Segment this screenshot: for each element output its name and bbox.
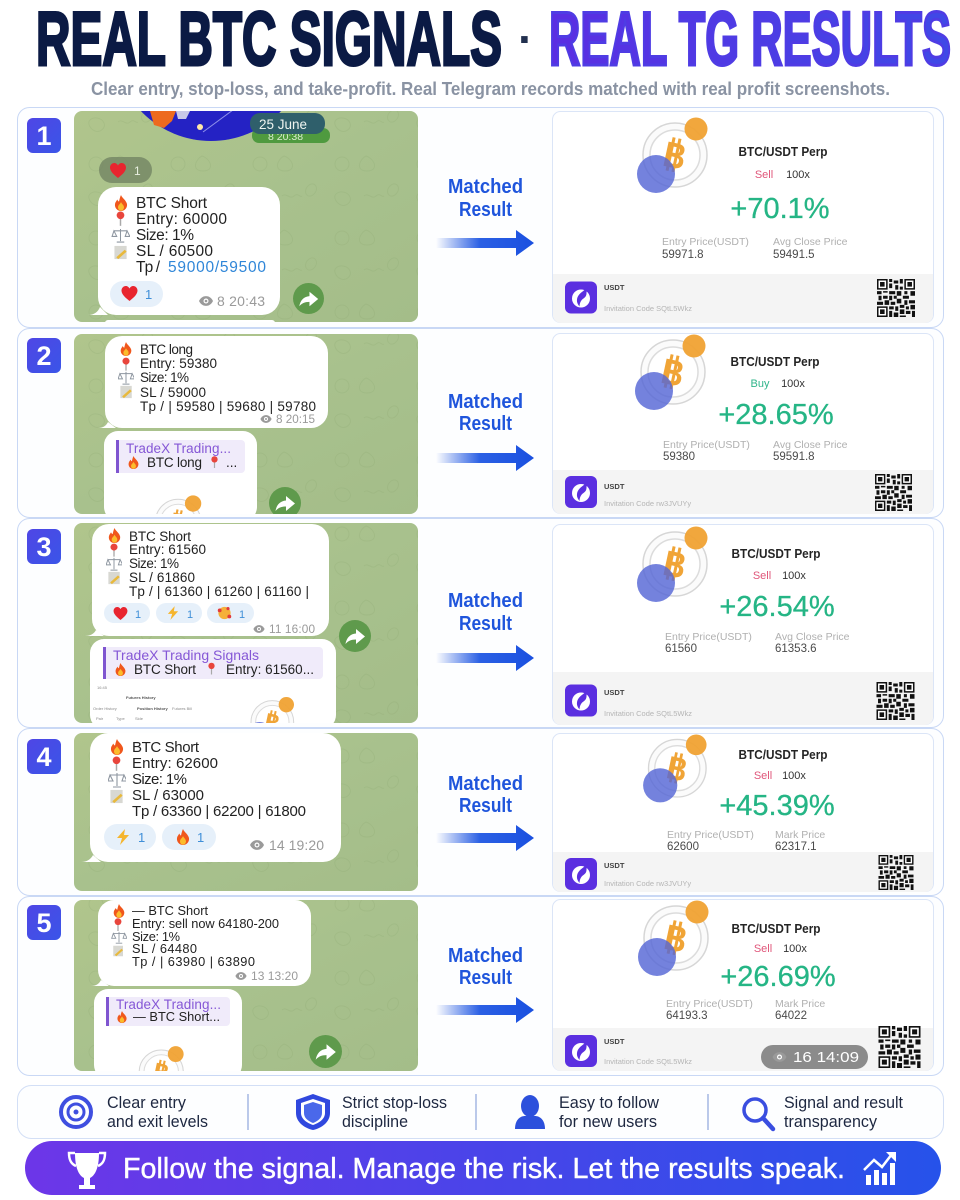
result card 1: Entry Price(USDT)	[662, 236, 749, 248]
signal text 5: SL / 64480	[132, 941, 197, 956]
result card 2: 59380	[663, 451, 695, 463]
result card 4: Sell	[754, 770, 772, 782]
feature: stop-loss	[342, 1094, 447, 1131]
quoted reply 3: TradeX Trading Signals	[113, 647, 259, 663]
result card 5: BTC/USDT Perp	[732, 922, 821, 936]
badge 4	[27, 739, 61, 774]
quoted reply 5: — BTC Short...	[133, 1009, 220, 1024]
signal text 1: Tp /	[136, 259, 161, 276]
result card 2: +28.65%	[718, 399, 834, 431]
icon: target	[61, 1097, 91, 1127]
label: matched result 1	[448, 176, 523, 221]
signal text 1	[112, 195, 266, 276]
quoted reply 3: Entry: 61560...	[226, 662, 314, 677]
result card 3: USDT	[604, 688, 625, 697]
result card 3	[552, 524, 934, 725]
panel: signal 5	[17, 896, 944, 1076]
result card 5: 100x	[783, 943, 807, 955]
badge 1: 1	[36, 121, 52, 151]
result card 5: +26.69%	[720, 961, 836, 993]
result card 3: Sell	[753, 570, 771, 582]
feature: transparency: transparency	[784, 1113, 878, 1131]
icon: trophy	[69, 1153, 105, 1189]
signal text 4: Size: 1%	[132, 771, 187, 788]
reactions 3: 1	[239, 609, 245, 621]
reactions 3	[104, 603, 254, 623]
label: matched result 3: Matched	[448, 590, 523, 612]
timestamp pill	[761, 1045, 868, 1069]
reactions 4: 1	[197, 830, 204, 845]
banner text: Follow the signal. Manage the risk. Let the results speak.	[123, 1153, 845, 1185]
label: matched result 3	[448, 590, 523, 635]
label: matched result 5: Result	[459, 967, 512, 989]
signal text 4: Entry: 62600	[132, 755, 218, 772]
reactions 4	[104, 824, 216, 850]
result card 2: Avg Close Price	[773, 439, 848, 451]
result card 2: 100x	[781, 378, 805, 390]
label: matched result 4: Matched	[448, 773, 523, 795]
feature: easy to follow: Easy to follow	[559, 1094, 659, 1112]
result card 1: Sell	[755, 169, 773, 181]
quoted reply 2: TradeX Trading...	[126, 441, 231, 456]
feature: stop-loss: Strict stop-loss	[342, 1094, 447, 1112]
result card 2	[552, 334, 934, 514]
badge 5: 5	[36, 908, 52, 938]
embedded history screenshot 3: 16:45	[97, 685, 108, 690]
signal text 4: SL / 63000	[132, 787, 204, 804]
icon: person	[515, 1095, 545, 1129]
reactions 4: 1	[138, 830, 145, 845]
arrow 3	[436, 645, 534, 671]
result card 1: 59491.5	[773, 249, 815, 261]
telegram screenshot 1: 8 20:38	[268, 131, 303, 143]
embedded history screenshot 3: Side	[135, 716, 144, 721]
result card 1: 59971.8	[662, 249, 704, 261]
embedded history screenshot 3: Position History	[137, 706, 168, 711]
result card 2: 59591.8	[773, 451, 815, 463]
label: matched result 3: Result	[459, 613, 512, 635]
feature: stop-loss: discipline	[342, 1113, 408, 1131]
signal text 4: Tp / 63360 | 62200 | 61800	[132, 803, 306, 820]
quoted reply 3	[103, 647, 323, 679]
result card 2: Invitation Code rw3JVUYy	[604, 499, 691, 508]
arrow 2	[436, 445, 534, 471]
icon: shield	[296, 1094, 330, 1130]
signal text 2: BTC long	[140, 342, 193, 357]
feature: transparency	[784, 1094, 903, 1131]
telegram screenshot 2: 8 20:15	[276, 413, 315, 426]
arrow 4	[436, 825, 534, 851]
result card 1: USDT	[604, 283, 625, 292]
result card 3: 100x	[782, 570, 806, 582]
label: matched result 5: Matched	[448, 945, 523, 967]
arrow 5	[436, 997, 534, 1023]
result card 4: Mark Price	[775, 829, 825, 841]
banner	[25, 1141, 941, 1195]
signal text 5	[112, 903, 279, 969]
telegram screenshot 5	[74, 900, 418, 1071]
signal text 3: Size: 1%	[129, 556, 179, 571]
label: matched result 4	[448, 773, 523, 817]
signal text 1: Size: 1%	[136, 227, 194, 244]
feature: clear entry: and exit levels	[107, 1113, 208, 1131]
result card 4: 100x	[782, 770, 806, 782]
label: matched result 2: Result	[459, 413, 512, 435]
result card 3: +26.54%	[719, 591, 835, 623]
panel: signal 2	[17, 328, 944, 518]
signal text 3	[106, 528, 309, 599]
signal text 4: BTC Short	[132, 739, 200, 756]
signal text 2: Size: 1%	[140, 370, 189, 385]
result card 4: 62317.1	[775, 841, 817, 853]
icon: magnifier	[744, 1099, 773, 1129]
result card 2: BTC/USDT Perp	[730, 355, 820, 369]
result card 4: USDT	[604, 861, 625, 870]
telegram screenshot 3	[74, 523, 418, 723]
result card 2: Entry Price(USDT)	[663, 439, 750, 451]
telegram screenshot 1: 1	[145, 287, 152, 302]
result card 4: BTC/USDT Perp	[738, 748, 828, 762]
telegram screenshot 1: 8 20:43	[217, 293, 265, 309]
embedded history screenshot 3: Type	[116, 716, 125, 721]
badge 4: 4	[36, 742, 52, 772]
feature: easy to follow: for new users	[559, 1113, 657, 1131]
embedded history screenshot 3: Futures Bill	[172, 706, 192, 711]
result card 5: 64193.3	[666, 1010, 708, 1022]
signal text 2: Tp / | 59580 | 59680 | 59780	[140, 399, 316, 414]
result card 3: Invitation Code SQtL5Wkz	[604, 709, 692, 718]
panel: signal 4	[18, 728, 944, 896]
signal text 5: Tp / | 63980 | 63890	[132, 954, 255, 969]
panel: signal 3	[18, 518, 944, 747]
result card 5: Invitation Code SQtL5Wkz	[604, 1057, 692, 1066]
panel: signal 1	[17, 107, 944, 328]
embedded history screenshot 3	[93, 685, 192, 721]
signal text 1: BTC Short	[136, 195, 208, 212]
result card 4: +45.39%	[719, 790, 835, 822]
label: matched result 5	[448, 945, 523, 989]
telegram screenshot 5: 13 13:20	[251, 969, 298, 983]
feature: clear entry	[107, 1094, 208, 1131]
quoted reply 2: ...	[226, 455, 237, 470]
label: matched result 2	[448, 391, 523, 435]
embedded history screenshot 3: Order History	[93, 706, 117, 711]
telegram screenshot 3: 11 16:00	[269, 622, 315, 636]
telegram screenshot 1	[74, 111, 418, 322]
reactions 3: 1	[187, 609, 193, 621]
result card 4: Entry Price(USDT)	[667, 829, 754, 841]
result card 1: BTC/USDT Perp	[738, 145, 828, 159]
quoted reply 5	[106, 997, 230, 1026]
arrow 1	[436, 230, 534, 256]
result card 3: 61560	[665, 643, 697, 655]
subtitle: Clear entry, stop-loss, and take-profit. Real Telegram records matched with real profit screenshots.	[91, 79, 890, 99]
signal text 4	[108, 739, 306, 820]
quoted reply 2	[116, 440, 245, 473]
title: ·	[518, 13, 533, 65]
badge 2	[27, 338, 61, 373]
telegram screenshot 1: 1	[134, 164, 141, 178]
quoted reply 3: BTC Short	[134, 662, 196, 677]
result card 4: Invitation Code rw3JVUYy	[604, 879, 691, 888]
telegram screenshot 4	[74, 733, 418, 891]
result card 3: 61353.6	[775, 643, 817, 655]
result card 1: +70.1%	[730, 193, 830, 225]
badge 5	[27, 905, 61, 940]
label: matched result 4: Result	[459, 795, 512, 817]
result card 1: Avg Close Price	[773, 236, 848, 248]
signal text 5: — BTC Short	[132, 903, 208, 918]
label: matched result 1: Result	[459, 199, 512, 221]
quoted reply 2: BTC long	[147, 455, 202, 470]
result card 5: Mark Price	[775, 998, 825, 1010]
result card 3: Entry Price(USDT)	[665, 631, 752, 643]
result card 5: Entry Price(USDT)	[666, 998, 753, 1010]
signal text 1: SL / 60500	[136, 243, 213, 260]
signal text 3: Entry: 61560	[129, 542, 206, 557]
feature: clear entry: Clear entry	[107, 1094, 187, 1112]
result card 2: USDT	[604, 482, 625, 491]
result card 3: BTC/USDT Perp	[732, 547, 821, 561]
result card 5: USDT	[604, 1037, 625, 1046]
badge 2: 2	[36, 341, 52, 371]
signal text 5: Entry: sell now 64180-200	[132, 916, 279, 931]
feature: easy to follow	[559, 1094, 659, 1131]
result card 1: Invitation Code SQtL5Wkz	[604, 304, 692, 313]
reactions 3: 1	[135, 609, 141, 621]
signal text 3: BTC Short	[129, 529, 191, 544]
embedded history screenshot 3: Futures History	[126, 695, 156, 700]
signal text 2	[118, 342, 316, 414]
badge 3	[27, 529, 61, 564]
quoted reply 5: TradeX Trading...	[116, 997, 221, 1012]
telegram screenshot 1: 25 June	[259, 117, 307, 132]
icon: rising chart	[864, 1152, 896, 1185]
result card 5	[552, 900, 934, 1071]
label: matched result 2: Matched	[448, 391, 523, 413]
telegram screenshot 2	[74, 334, 418, 514]
feature strip	[18, 1086, 944, 1138]
signal text 1: Entry: 60000	[136, 211, 227, 228]
result card 2: Buy	[751, 378, 770, 390]
badge 1	[27, 118, 61, 153]
result card 4	[552, 734, 934, 892]
signal text 1: 59000/59500	[168, 259, 266, 276]
signal text 2: SL / 59000	[140, 385, 206, 400]
result card 4: 62600	[667, 841, 699, 853]
timestamp pill: 16 14:09	[793, 1049, 859, 1066]
result card 3: Avg Close Price	[775, 631, 850, 643]
result card 1: 100x	[786, 169, 810, 181]
embedded history screenshot 3: Pair	[96, 716, 104, 721]
feature: transparency: Signal and result	[784, 1094, 903, 1112]
badge 3: 3	[36, 532, 52, 562]
signal text 3: Tp / | 61360 | 61260 | 61160 |	[129, 584, 309, 599]
signal text 5: Size: 1%	[132, 929, 180, 944]
label: matched result 1: Matched	[448, 176, 523, 198]
result card 1	[552, 112, 934, 323]
signal text 2: Entry: 59380	[140, 356, 217, 371]
result card 5: Sell	[754, 943, 772, 955]
signal text 3: SL / 61860	[129, 570, 195, 585]
result card 5: 64022	[775, 1010, 807, 1022]
telegram screenshot 4: 14 19:20	[269, 837, 324, 853]
